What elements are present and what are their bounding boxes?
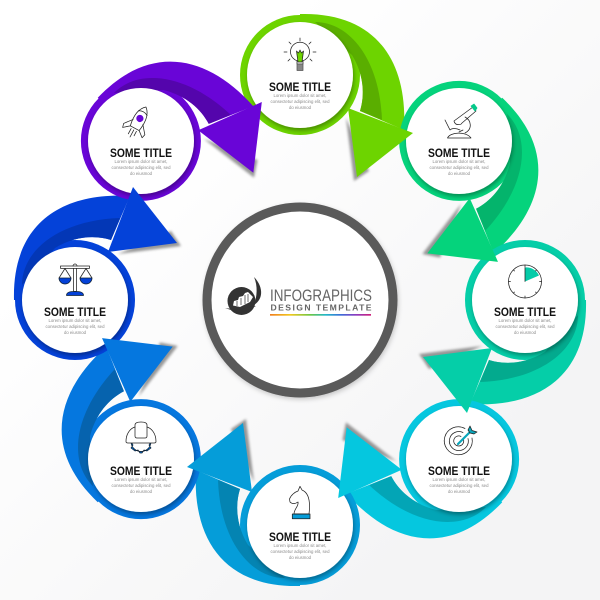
arrow body 4	[343, 374, 545, 576]
logo title: INFOGRAPHICS	[270, 287, 372, 305]
white circle 3	[472, 247, 578, 353]
arrow body 1	[240, 14, 404, 135]
description 4: do eiusmod	[448, 489, 471, 494]
arrow body 3	[465, 240, 586, 404]
description 3: Lorem ipsum dolor sit amet,	[498, 318, 552, 323]
arrow body 5	[196, 465, 360, 586]
icon: microscope	[445, 104, 477, 138]
step 6: engineering	[24, 343, 226, 545]
step 2: research	[374, 55, 576, 257]
description 8: do eiusmod	[130, 171, 153, 176]
arrowhead 4	[304, 417, 403, 516]
description 7: consectetur adipiscing elit, sed	[46, 324, 105, 329]
step 1: idea	[240, 14, 404, 135]
description 6: Lorem ipsum dolor sit amet,	[114, 477, 168, 482]
step 5: strategy	[196, 465, 360, 586]
icon: hard hat and gear	[126, 422, 156, 453]
description 3: do eiusmod	[514, 330, 537, 335]
white circle 1	[247, 22, 353, 128]
description 8: Lorem ipsum dolor sit amet,	[114, 159, 168, 164]
white circle 7	[22, 247, 128, 353]
description 1: do eiusmod	[289, 105, 312, 110]
arrow body 2	[374, 55, 576, 257]
arrowhead 7	[108, 187, 181, 254]
arrowhead 8	[197, 84, 296, 183]
title 1: SOME TITLE	[269, 82, 331, 94]
arrowhead 1	[346, 108, 413, 181]
white circle 5	[247, 472, 353, 578]
description 8: consectetur adipiscing elit, sed	[112, 165, 171, 170]
arrowhead 3	[419, 346, 492, 413]
arrow body 6	[24, 343, 226, 545]
white circle 8	[88, 88, 194, 194]
description 5: Lorem ipsum dolor sit amet,	[274, 543, 326, 548]
title 6: SOME TITLE	[110, 466, 172, 478]
white circle 2	[406, 88, 512, 194]
arrowhead 6	[84, 304, 183, 403]
title 2: SOME TITLE	[428, 148, 490, 160]
icon: target	[444, 426, 477, 455]
description 6: do eiusmod	[130, 489, 153, 494]
white circle 6	[88, 406, 194, 512]
description 6: consectetur adipiscing elit, sed	[112, 483, 171, 488]
icon: scales	[59, 264, 92, 296]
icon: chess knight	[290, 486, 310, 519]
description 7: do eiusmod	[64, 330, 87, 335]
white circle 4	[406, 406, 512, 512]
central hub	[202, 202, 398, 398]
description 2: consectetur adipiscing elit, sed	[430, 165, 489, 170]
title 4: SOME TITLE	[428, 466, 490, 478]
icon: light bulb	[284, 38, 316, 70]
arrow body 8	[55, 24, 257, 226]
description 1: consectetur adipiscing elit, sed	[270, 99, 330, 104]
description 4: consectetur adipiscing elit, sed	[430, 483, 489, 488]
description 1: Lorem ipsum dolor sit amet,	[274, 93, 326, 98]
title 3: SOME TITLE	[494, 307, 556, 319]
logo mark	[225, 277, 261, 315]
description 5: do eiusmod	[289, 555, 312, 560]
icon: rocket	[119, 101, 157, 143]
logo subtitle: DESIGN TEMPLATE	[270, 303, 372, 313]
step 4: target	[343, 374, 545, 576]
hub ring	[202, 202, 398, 398]
title 8: SOME TITLE	[110, 148, 172, 160]
step 7: justice	[14, 196, 135, 360]
description 7: Lorem ipsum dolor sit amet,	[48, 318, 102, 323]
hub white disc	[212, 212, 388, 388]
arrow body 7	[14, 196, 135, 360]
description 4: Lorem ipsum dolor sit amet,	[432, 477, 486, 482]
description 5: consectetur adipiscing elit, sed	[270, 549, 330, 554]
description 2: do eiusmod	[448, 171, 471, 176]
description 3: consectetur adipiscing elit, sed	[496, 324, 555, 329]
icon: clock	[508, 265, 542, 298]
step 8: launch	[55, 24, 257, 226]
title 7: SOME TITLE	[44, 307, 106, 319]
title 5: SOME TITLE	[269, 532, 331, 544]
rainbow line	[270, 314, 371, 316]
arrowhead 2	[417, 197, 516, 296]
description 2: Lorem ipsum dolor sit amet,	[432, 159, 486, 164]
arrowhead 5	[187, 419, 254, 492]
step 3: time	[465, 240, 586, 404]
